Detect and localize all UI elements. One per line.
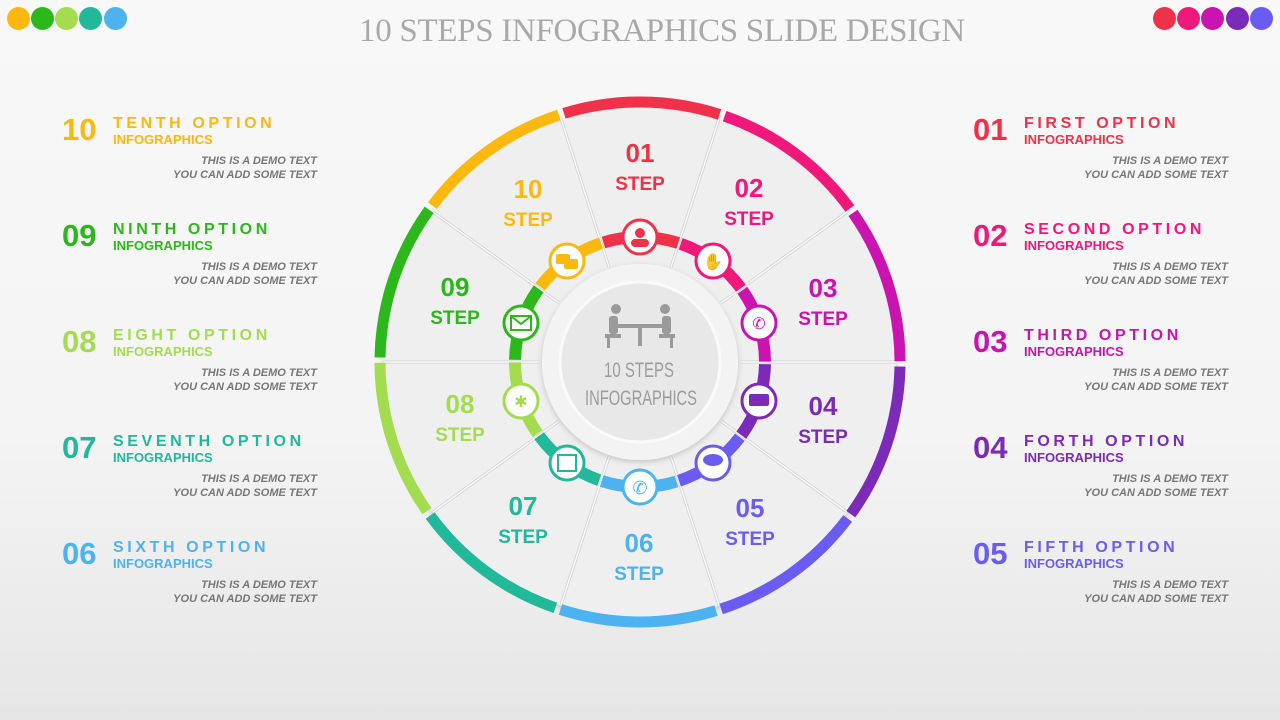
right option 05: YOU CAN ADD SOME TEXT <box>1084 593 1228 605</box>
icon glyphs: ✋ <box>703 252 723 271</box>
right option 05: THIS IS A DEMO TEXT <box>1112 579 1228 591</box>
left option 08: 08 <box>62 324 96 359</box>
step labels: 08 <box>446 389 474 419</box>
left option 08: EIGHT OPTION <box>113 327 271 344</box>
right option 04: INFOGRAPHICS <box>1024 450 1124 465</box>
step labels: STEP <box>724 209 774 230</box>
right option 01: THIS IS A DEMO TEXT <box>1112 155 1228 167</box>
icon glyphs: ✆ <box>632 478 648 498</box>
left option 07: SEVENTH OPTION <box>113 433 305 450</box>
color dots right <box>1153 7 1273 30</box>
left option 06: THIS IS A DEMO TEXT <box>201 579 317 591</box>
left option 07: YOU CAN ADD SOME TEXT <box>173 487 317 499</box>
left option 06: 06 <box>62 536 96 571</box>
step labels: 01 <box>626 138 654 168</box>
title: 10 STEPS INFOGRAPHICS SLIDE DESIGN <box>359 13 965 49</box>
step labels: 03 <box>809 273 837 303</box>
left option 07: INFOGRAPHICS <box>113 450 213 465</box>
right option 02 <box>973 218 1229 287</box>
right option 02: 02 <box>973 218 1007 253</box>
right option 01: YOU CAN ADD SOME TEXT <box>1084 169 1228 181</box>
step labels: 10 <box>514 174 542 204</box>
left option 09: 09 <box>62 218 96 253</box>
right option 05 <box>973 536 1229 605</box>
right option 02: THIS IS A DEMO TEXT <box>1112 261 1228 273</box>
right option 02: INFOGRAPHICS <box>1024 238 1124 253</box>
right option 02: YOU CAN ADD SOME TEXT <box>1084 275 1228 287</box>
step labels: STEP <box>798 309 848 330</box>
left option 09: THIS IS A DEMO TEXT <box>201 261 317 273</box>
right option 03: 03 <box>973 324 1007 359</box>
left option 08: THIS IS A DEMO TEXT <box>201 367 317 379</box>
step labels: STEP <box>430 308 480 329</box>
left option 09 <box>62 218 318 287</box>
right option 01: FIRST OPTION <box>1024 115 1179 132</box>
right option 05: 05 <box>973 536 1007 571</box>
icon glyphs: ✆ <box>752 316 766 333</box>
right option 04 <box>973 430 1229 499</box>
left option 10: THIS IS A DEMO TEXT <box>201 155 317 167</box>
right option 03 <box>973 324 1229 393</box>
center hub: 10 STEPS <box>604 359 674 382</box>
left option 10: INFOGRAPHICS <box>113 132 213 147</box>
step labels: 05 <box>736 493 764 523</box>
left option 06: INFOGRAPHICS <box>113 556 213 571</box>
right option 04: FORTH OPTION <box>1024 433 1188 450</box>
color dots left <box>7 7 127 30</box>
step labels: STEP <box>498 527 548 548</box>
left option 10: TENTH OPTION <box>113 115 275 132</box>
left option 07 <box>62 430 318 499</box>
left option 06: SIXTH OPTION <box>113 539 269 556</box>
right option 01: INFOGRAPHICS <box>1024 132 1124 147</box>
left option 06: YOU CAN ADD SOME TEXT <box>173 593 317 605</box>
left option 10 <box>62 112 318 181</box>
right option 04: 04 <box>973 430 1007 465</box>
step icons <box>504 220 776 504</box>
center hub: INFOGRAPHICS <box>585 387 697 410</box>
step labels: 07 <box>509 491 537 521</box>
step labels: STEP <box>615 174 665 195</box>
step labels: 04 <box>809 391 838 421</box>
right option 03: THIS IS A DEMO TEXT <box>1112 367 1228 379</box>
step labels: STEP <box>435 425 485 446</box>
outer colored ring <box>276 0 1004 720</box>
right option 03: THIRD OPTION <box>1024 327 1182 344</box>
left option 08: INFOGRAPHICS <box>113 344 213 359</box>
step labels: 06 <box>625 528 653 558</box>
step labels: STEP <box>725 529 775 550</box>
left option 07: 07 <box>62 430 96 465</box>
icon: meeting <box>605 304 675 348</box>
left option 09: NINTH OPTION <box>113 221 271 238</box>
right option 02: SECOND OPTION <box>1024 221 1205 238</box>
step labels: STEP <box>614 564 664 585</box>
right option 05: INFOGRAPHICS <box>1024 556 1124 571</box>
right option 04: THIS IS A DEMO TEXT <box>1112 473 1228 485</box>
step labels: STEP <box>798 427 848 448</box>
icon glyphs <box>511 228 769 498</box>
left option 08: YOU CAN ADD SOME TEXT <box>173 381 317 393</box>
right option 05: FIFTH OPTION <box>1024 539 1178 556</box>
right option 03: INFOGRAPHICS <box>1024 344 1124 359</box>
inner colored ring <box>465 187 815 537</box>
icon glyphs: ✱ <box>514 394 528 411</box>
left option 09: INFOGRAPHICS <box>113 238 213 253</box>
right option 03: YOU CAN ADD SOME TEXT <box>1084 381 1228 393</box>
step labels: STEP <box>503 210 553 231</box>
step labels: 02 <box>735 173 763 203</box>
wedge panels <box>384 106 896 618</box>
step labels <box>430 138 848 585</box>
right option 01: 01 <box>973 112 1007 147</box>
center hub <box>542 264 738 460</box>
step labels: 09 <box>441 272 469 302</box>
left option 10: YOU CAN ADD SOME TEXT <box>173 169 317 181</box>
left option 08 <box>62 324 318 393</box>
left option 06 <box>62 536 318 605</box>
left option 07: THIS IS A DEMO TEXT <box>201 473 317 485</box>
left option 10: 10 <box>62 112 96 147</box>
right option 01 <box>973 112 1229 181</box>
left option 09: YOU CAN ADD SOME TEXT <box>173 275 317 287</box>
right option 04: YOU CAN ADD SOME TEXT <box>1084 487 1228 499</box>
